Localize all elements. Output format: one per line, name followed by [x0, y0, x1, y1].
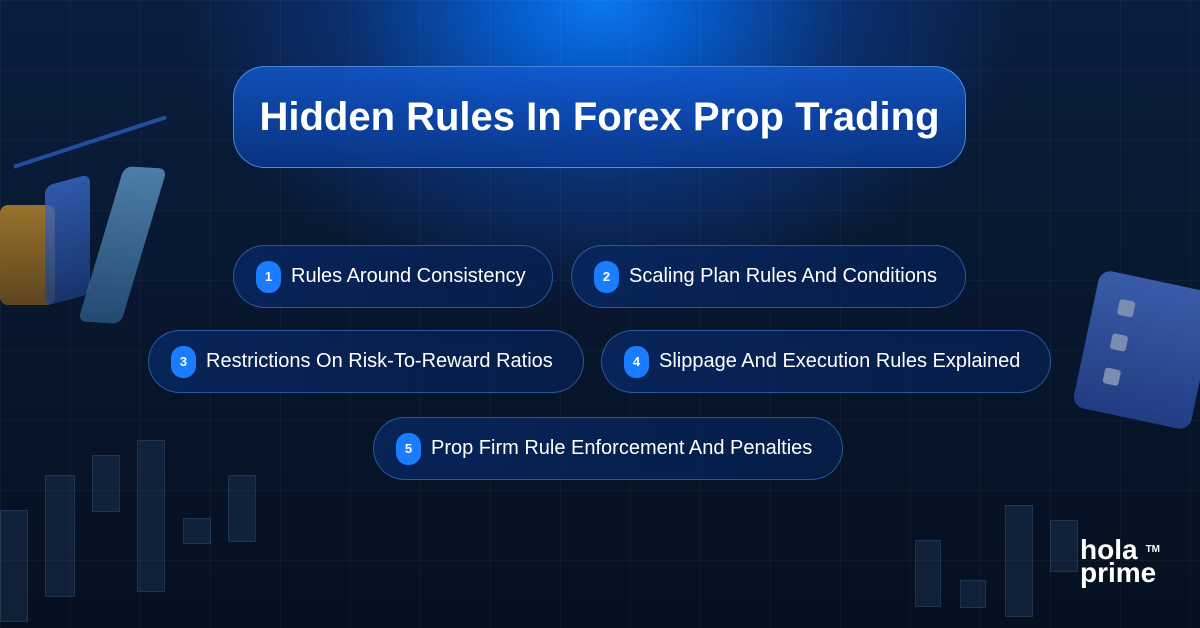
- item 1: [233, 245, 553, 308]
- item 4: 4: [633, 354, 640, 369]
- item 5: Prop Firm Rule Enforcement And Penalties: [431, 437, 812, 459]
- icon: 3d bar chart left: [0, 115, 167, 324]
- title: Hidden Rules In Forex Prop Trading: [259, 94, 940, 138]
- icon: clipboard right: [1072, 269, 1200, 431]
- item 1: 1: [265, 269, 272, 284]
- item 1: Rules Around Consistency: [291, 265, 526, 287]
- item 4: Slippage And Execution Rules Explained: [659, 350, 1020, 372]
- item 5: [373, 417, 843, 480]
- item 4: [601, 330, 1051, 393]
- item 5: 5: [405, 441, 412, 456]
- item 3: [148, 330, 584, 393]
- item 2: [571, 245, 966, 308]
- item 3: 3: [180, 354, 187, 369]
- logo: hola TM: [1080, 534, 1160, 565]
- candlesticks left: [0, 440, 256, 622]
- item 2: 2: [603, 269, 610, 284]
- item 3: Restrictions On Risk-To-Reward Ratios: [206, 350, 553, 372]
- logo: [1080, 534, 1160, 588]
- item 2: Scaling Plan Rules And Conditions: [629, 265, 937, 287]
- candlesticks right: [915, 505, 1078, 617]
- logo: prime: [1080, 557, 1156, 588]
- title: [233, 66, 966, 168]
